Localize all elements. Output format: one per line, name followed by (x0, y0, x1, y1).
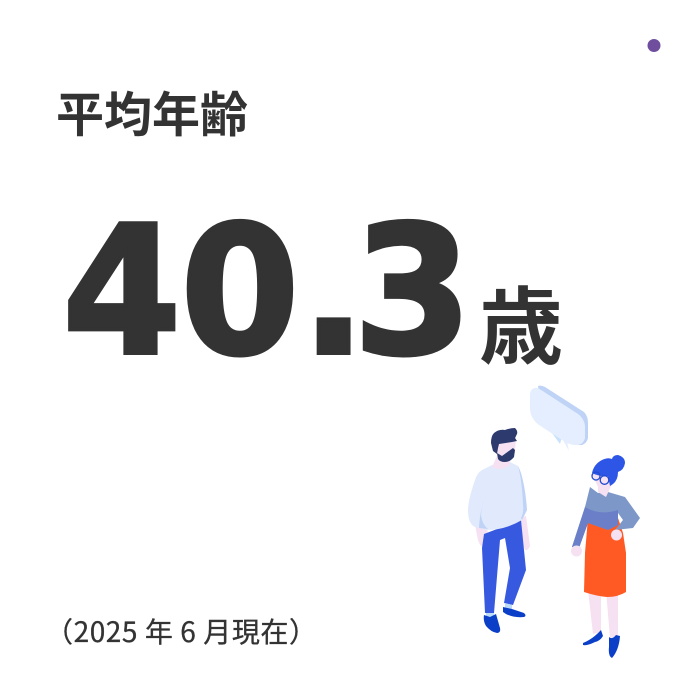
woman: legs (588, 590, 618, 638)
man (468, 428, 530, 633)
illustration: two people talking (468, 386, 640, 658)
man: sweater shading (479, 466, 527, 529)
icon: purple dot (648, 39, 660, 52)
man: socks (486, 603, 512, 618)
man: shoes (484, 607, 526, 633)
woman: glasses (592, 472, 609, 484)
woman: sweater lower shading (572, 507, 618, 548)
woman: skirt (584, 518, 626, 597)
man: legs (482, 520, 526, 613)
man: beard (497, 448, 515, 462)
man: far arm (519, 516, 530, 550)
man: hair (491, 428, 517, 454)
title: 平均年齢 (56, 90, 248, 142)
woman: hair (592, 455, 625, 486)
woman: sweater (572, 487, 640, 548)
woman: neck and face (592, 472, 612, 497)
icon: speech bubble (530, 386, 588, 451)
footnote: as of June 2025: （2025 年 6 月現在） (45, 611, 317, 651)
unit: years old: 歳 (479, 281, 563, 375)
big number: average age: 40.3 (62, 189, 472, 396)
woman: shoes (583, 630, 620, 658)
man: sweater (468, 462, 527, 530)
woman: hands (571, 546, 582, 556)
man: neck and face (492, 436, 516, 469)
man: near hand (475, 525, 488, 547)
woman (571, 455, 640, 658)
